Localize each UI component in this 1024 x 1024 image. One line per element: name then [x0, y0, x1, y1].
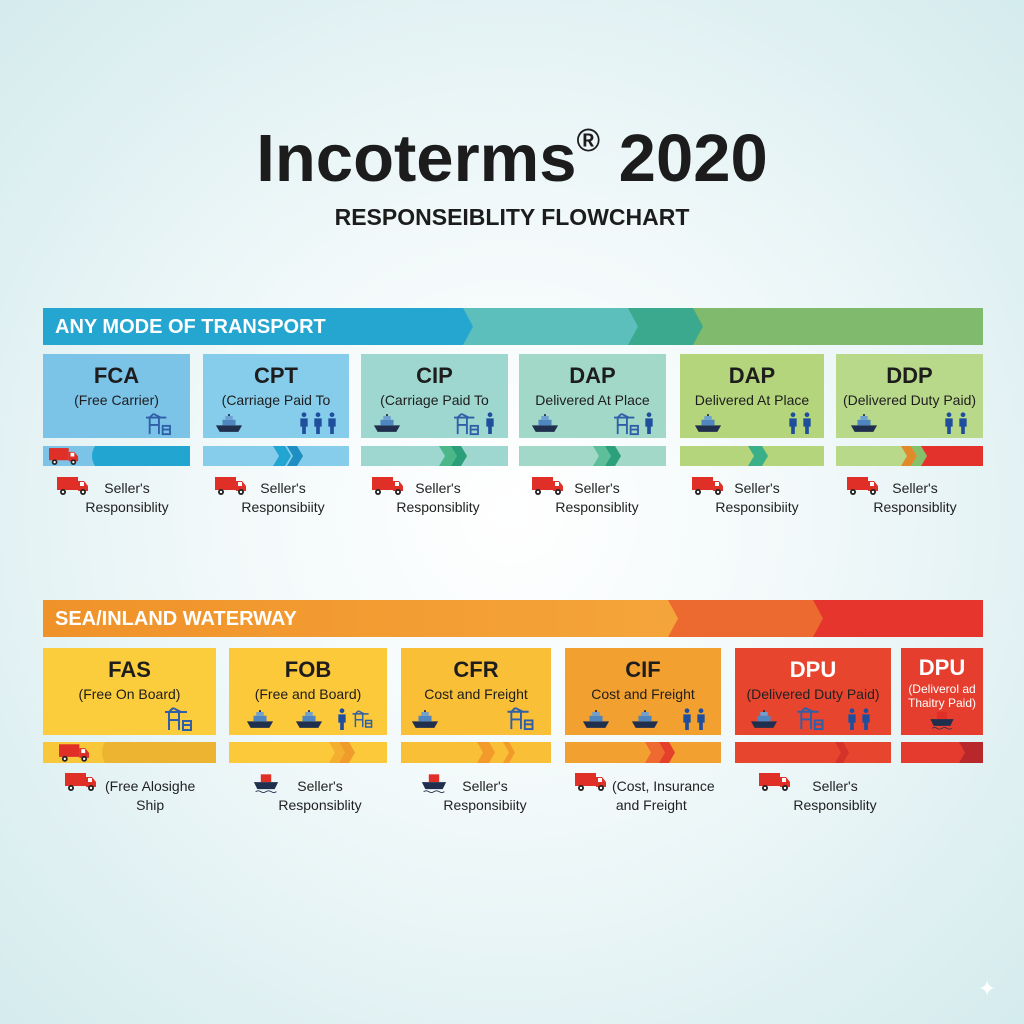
responsibility labels: bottom row: and Freight — [616, 797, 687, 813]
card: DAP — [519, 354, 666, 438]
responsibility labels: bottom row: (Cost, Insurance — [612, 778, 715, 794]
banner: any mode of transport: ANY MODE OF TRANSPORT — [55, 316, 326, 338]
responsibility labels: top row: Responsibiity — [241, 499, 325, 515]
card: FAS: FAS — [108, 657, 151, 682]
responsibility labels: top row: Seller's — [415, 480, 461, 496]
responsibility labels: bottom row: Responsiblity — [793, 797, 877, 813]
responsibility labels: top row — [57, 477, 957, 515]
card: FCA — [43, 354, 190, 438]
responsibility labels: top row: Seller's — [260, 480, 306, 496]
card: FOB — [229, 648, 387, 735]
responsibility labels: top row: Responsiblity — [396, 499, 480, 515]
responsibility labels: bottom row: Seller's — [297, 778, 343, 794]
title: Incoterms® 2020 — [256, 121, 768, 196]
card: CFR — [401, 648, 551, 735]
card: CIF: CIF — [625, 657, 661, 682]
card: DPU 2 — [901, 648, 983, 735]
responsibility labels: bottom row — [65, 773, 877, 813]
responsibility labels: bottom row: Ship — [136, 797, 164, 813]
card: CPT: (Carriage Paid To — [222, 392, 330, 408]
responsibility labels: top row: Responsiblity — [85, 499, 169, 515]
card: DDP: (Delivered Duty Paid) — [843, 392, 976, 408]
responsibility labels: bottom row: Seller's — [462, 778, 508, 794]
card: CIP: (Carriage Paid To — [380, 392, 489, 408]
card: DPU 2: DPU — [919, 655, 965, 680]
card: DPU 2: (Deliverol ad — [908, 682, 976, 696]
responsibility labels: top row: Responsibiity — [715, 499, 799, 515]
card: FOB: (Free and Board) — [255, 686, 361, 702]
responsibility labels: bottom row: (Free Alosighe — [105, 778, 195, 794]
card: DAP: DAP — [569, 363, 616, 388]
progress bars: top row — [43, 446, 983, 466]
card: DAP 2 — [680, 354, 824, 438]
card: FCA: FCA — [94, 363, 139, 388]
card: FAS — [43, 648, 216, 735]
card: FAS: (Free On Board) — [79, 686, 180, 702]
responsibility labels: bottom row: Responsibiity — [443, 797, 527, 813]
card: CPT — [203, 354, 349, 438]
responsibility labels: top row: Seller's — [574, 480, 620, 496]
card: DPU 2: Thaitry Paid) — [908, 696, 976, 710]
card: DAP 2: Delivered At Place — [695, 392, 809, 408]
card: DPU — [735, 648, 891, 735]
subtitle: RESPONSEIBLITY FLOWCHART — [335, 204, 689, 230]
card: DAP: Delivered At Place — [535, 392, 650, 408]
card: DPU: (Delivered Duty Paid) — [746, 686, 880, 702]
responsibility labels: bottom row: Responsiblity — [278, 797, 362, 813]
progress bars: bottom row — [43, 742, 983, 763]
card: DDP — [836, 354, 983, 438]
icon: sparkle: ✦ — [978, 976, 996, 1001]
card: FCA: (Free Carrier) — [74, 392, 159, 408]
banner: sea/inland waterway — [43, 600, 983, 637]
card: DPU: DPU — [790, 657, 836, 682]
responsibility labels: bottom row: Seller's — [812, 778, 858, 794]
card: CIF — [565, 648, 721, 735]
card: FOB: FOB — [285, 657, 331, 682]
responsibility labels: top row: Responsiblity — [555, 499, 639, 515]
card: CIF: Cost and Freight — [591, 686, 695, 702]
card: DDP: DDP — [886, 363, 933, 388]
card: CPT: CPT — [254, 363, 298, 388]
card: CFR: Cost and Freight — [424, 686, 528, 702]
card: DAP 2: DAP — [729, 363, 775, 388]
responsibility labels: top row: Seller's — [104, 480, 150, 496]
card: CFR: CFR — [453, 657, 499, 682]
responsibility labels: top row: Seller's — [734, 480, 780, 496]
responsibility labels: top row: Responsiblity — [873, 499, 957, 515]
card: CIP — [361, 354, 508, 438]
banner: any mode of transport — [43, 308, 983, 345]
card: CIP: CIP — [416, 363, 453, 388]
banner: sea/inland waterway: SEA/INLAND WATERWAY — [55, 608, 297, 630]
responsibility labels: top row: Seller's — [892, 480, 938, 496]
